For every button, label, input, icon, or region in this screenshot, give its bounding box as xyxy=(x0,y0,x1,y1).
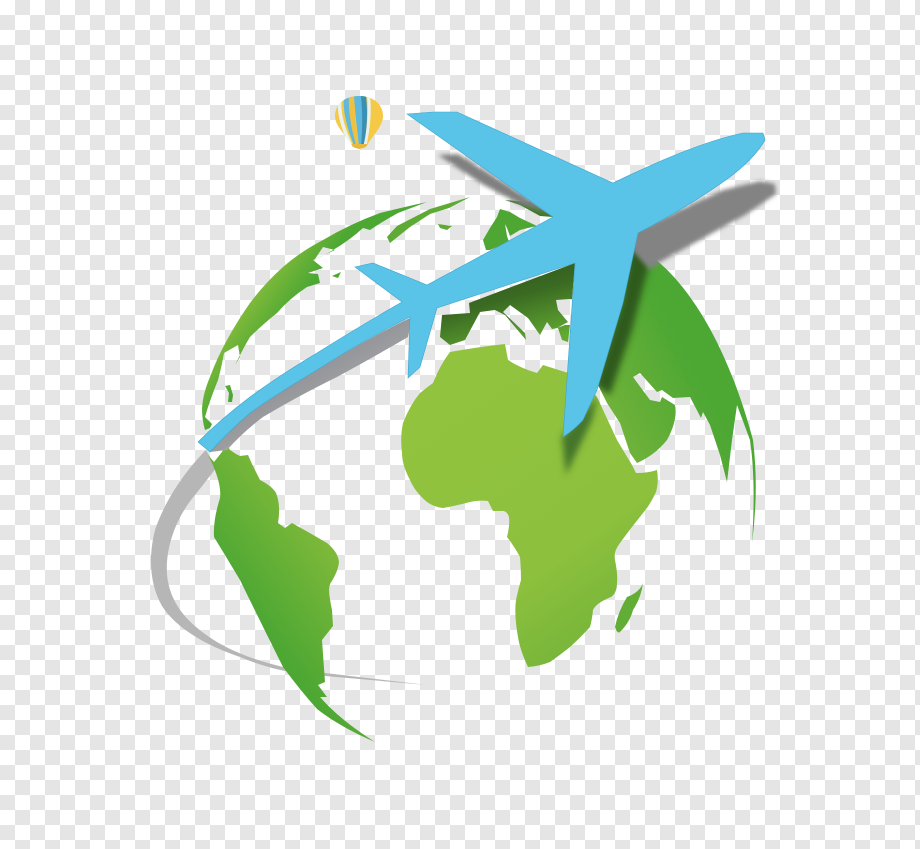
wing shadow on asia xyxy=(595,240,650,395)
scandinavia xyxy=(483,209,537,250)
airplane with curved trail xyxy=(198,112,765,452)
fuselage trail shadow xyxy=(210,317,412,452)
north america arc xyxy=(202,202,427,430)
africa xyxy=(401,344,658,667)
hot air balloon xyxy=(335,96,383,150)
asia and arabia xyxy=(590,235,756,543)
left wing shadow xyxy=(438,154,553,214)
northern dark streaks xyxy=(505,200,553,217)
wing shadow on africa xyxy=(562,395,598,475)
gray orbit swoosh xyxy=(151,450,427,685)
madagascar xyxy=(615,583,643,632)
greenland and iceland xyxy=(387,197,470,243)
europe xyxy=(440,263,575,345)
right wing shadow xyxy=(632,181,776,270)
globe and airplane illustration xyxy=(151,96,778,742)
south america xyxy=(208,443,375,742)
